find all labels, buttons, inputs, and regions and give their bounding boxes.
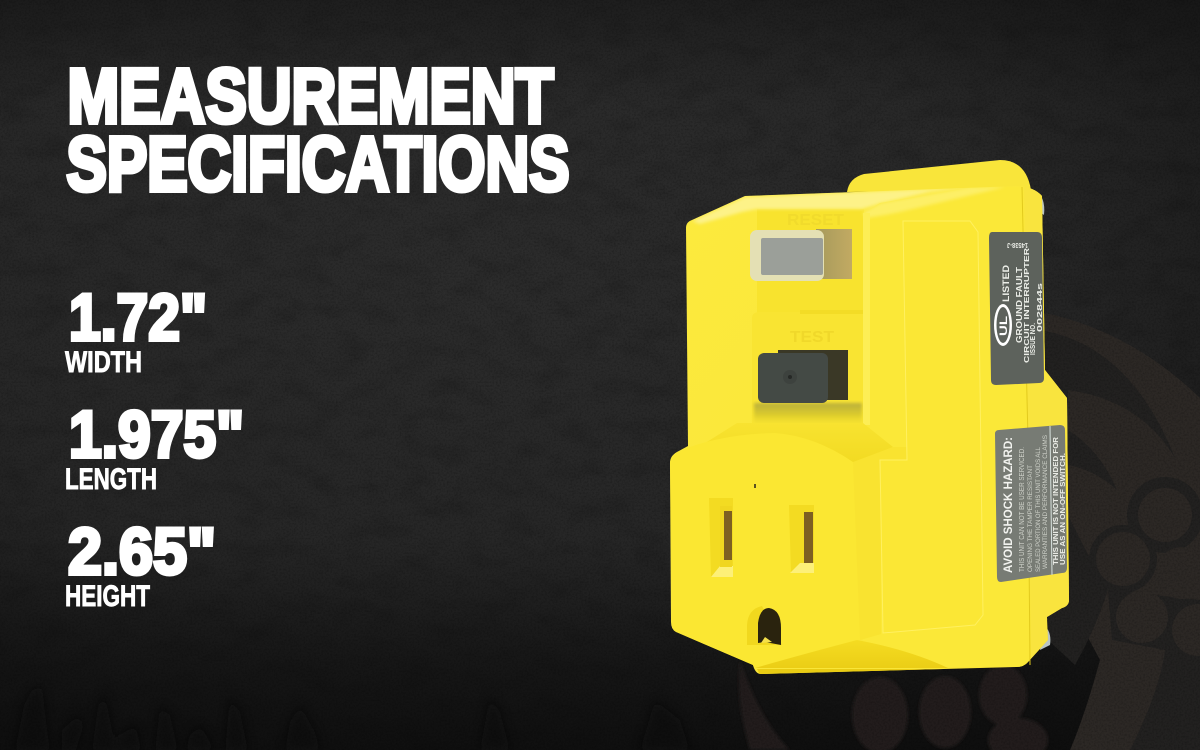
speck: [754, 484, 756, 488]
RESET embossed label: RESET: [787, 212, 844, 229]
test button: [758, 350, 848, 403]
spec: length: [65, 397, 244, 496]
outlet top bevel: [708, 423, 892, 462]
product: yellow GFCI adapter: [670, 160, 1069, 675]
top highlight: [692, 187, 970, 224]
UL label: GROUND FAULT: [1014, 266, 1024, 343]
emblem dots: [1096, 488, 1200, 656]
UL logo: UL: [998, 316, 1010, 336]
UL label: ISSUE NO.: [1030, 323, 1037, 355]
right side face: [1030, 188, 1069, 659]
right block: [863, 187, 1031, 667]
test button shadow: [752, 401, 863, 421]
inset panel: [880, 221, 983, 633]
block bevel highlight: [863, 187, 1005, 218]
back mounting tab: [847, 160, 1031, 192]
outlet slot: right: [789, 505, 814, 573]
hazard label: OPENING THE TAMPER RESISTANT: [1027, 465, 1034, 572]
block left edge highlight: [863, 213, 870, 425]
background: faint brown swirl emblem: [1040, 312, 1200, 750]
spec: height: [65, 514, 216, 613]
bottom bevel: [755, 640, 948, 668]
hazard label: WARRANTIES AND PERFORMANCE CLAIMS: [1042, 434, 1049, 569]
outlet slot: left: [709, 498, 733, 577]
hazard label: AVOID SHOCK HAZARD:: [1001, 437, 1015, 573]
reset button: [750, 229, 852, 281]
TEST embossed label: TEST: [790, 329, 834, 346]
title: [66, 54, 570, 208]
hazard label: [995, 425, 1067, 582]
spec: length: 1.975": [69, 397, 244, 471]
spec: width: 1.72": [69, 280, 207, 354]
button recess: [757, 209, 864, 312]
title: MEASUREMENT: [68, 54, 554, 140]
UL label: CIRCUIT INTERRUPTER: [1022, 247, 1031, 363]
hazard label: USE AS AN ON-OFF SWITCH.: [1060, 453, 1067, 565]
seam line: [1022, 187, 1030, 665]
outlet face: [670, 441, 853, 666]
UL logo: [994, 304, 1012, 346]
hazard label: THIS UNIT CAN NOT BE USER SERVICED.: [1019, 447, 1026, 572]
metal rivets: [1034, 190, 1050, 650]
spec: height: HEIGHT: [65, 580, 150, 613]
ground hole: [747, 606, 782, 645]
hazard label: THIS UNIT IS NOT INTENDED FOR: [1053, 437, 1060, 565]
spec: length: LENGTH: [65, 463, 157, 496]
spec: width: WIDTH: [65, 346, 142, 379]
title: SPECIFICATIONS: [66, 122, 570, 208]
UL label: [989, 232, 1044, 385]
background: emblem lower petals under product: [739, 660, 1048, 750]
hazard label: SEALED PORTION OF THIS UNIT VOIDS ALL: [1035, 447, 1042, 572]
UL label: 14538-J: [1007, 241, 1028, 248]
main body: [670, 186, 1069, 674]
test raised block: [752, 312, 757, 423]
spec: width: [65, 280, 207, 379]
outlet side facet: [855, 451, 882, 462]
spec: height: 2.65": [68, 514, 216, 588]
UL label: LISTED: [1001, 265, 1012, 302]
UL label: 002844s: [1037, 283, 1044, 332]
